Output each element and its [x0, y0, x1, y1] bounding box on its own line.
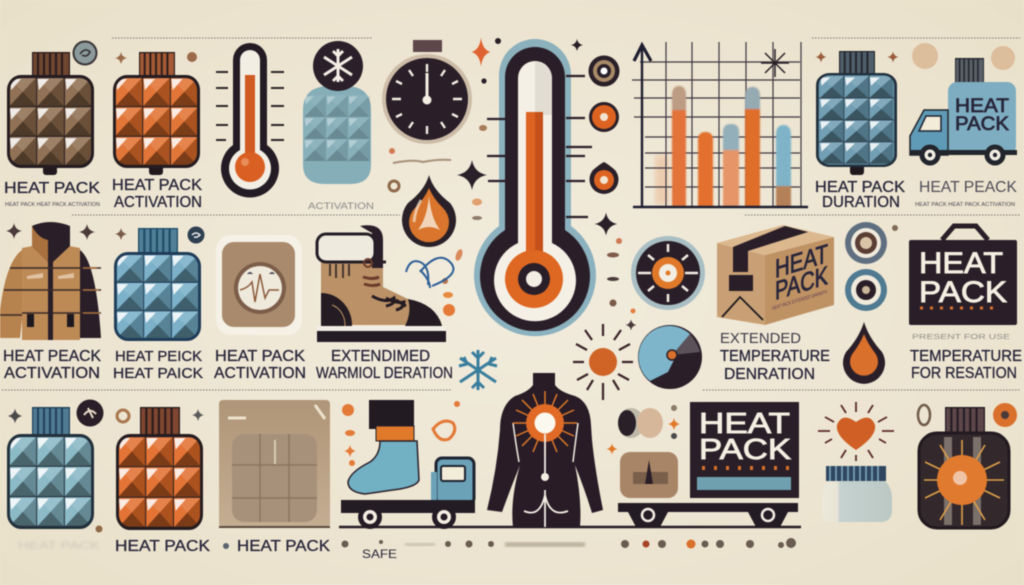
bottom dots — [342, 538, 796, 548]
heading: temperature for resation — [910, 334, 1022, 382]
heading: extendimed warmiol deration: WARMIOL DERATION — [316, 365, 453, 382]
marks — [342, 401, 460, 466]
heading: heat pack activation — [112, 177, 202, 211]
heart with rays — [818, 402, 894, 461]
icon: snowflake badge — [313, 41, 363, 91]
dotted dividers — [2, 38, 1020, 390]
icon: badge — [76, 400, 104, 426]
blue scribble — [406, 258, 453, 288]
heading: heat pack duration: HEAT PACK — [815, 179, 905, 196]
heading: heat pack: HEAT PACK HEAT PACK ACTIVATION — [5, 202, 100, 208]
truck with heat pack — [910, 43, 1017, 166]
heading: heat pack heat paick: HEAT PAICK — [113, 365, 203, 382]
heat pack crate on trailer — [618, 402, 799, 527]
heading: heat peack: HEAT PEACK — [919, 179, 1017, 196]
icon: winter boot — [317, 225, 446, 342]
small thermometer — [216, 43, 284, 197]
truck label — [955, 96, 1009, 135]
heading: heat pack activation: HEAT PACK — [112, 177, 202, 194]
heading: heat pack — [4, 180, 100, 208]
body silhouette with heat — [487, 373, 603, 527]
blue insulated pad — [303, 41, 371, 184]
heading: temperature for resation: PRESENT FOR USE — [912, 334, 1010, 341]
heat pack bag — [909, 226, 1017, 325]
heading: heat pack heat paick — [113, 348, 203, 382]
heading: heat pack activation: ACTIVATION — [214, 365, 306, 382]
icon: orange drop — [843, 322, 885, 384]
heading: extended temperature denration — [720, 330, 830, 383]
tan heat pad panel — [219, 400, 330, 528]
globe disc — [638, 325, 702, 389]
heading: extendimed warmiol deration: EXTENDIMED — [331, 348, 430, 365]
truck label: HEAT — [955, 96, 1009, 117]
heading: heat pack duration — [815, 179, 905, 211]
heading: heat pack: HEAT PACK — [115, 538, 210, 555]
heading: heat pack heat paick: HEAT PEICK — [115, 348, 202, 365]
heading: heat pack activation — [214, 348, 306, 382]
icon: blue snowflake — [459, 350, 497, 390]
bars — [672, 86, 791, 207]
label: activation: ACTIVATION — [308, 201, 374, 211]
faded caption: HEAT PACK — [18, 540, 101, 552]
pack: dark burst — [918, 403, 1017, 528]
radiating sun — [513, 391, 577, 455]
cardboard box — [717, 225, 834, 325]
pack: orange heat pack — [113, 52, 200, 175]
bag label — [919, 247, 1007, 309]
icon: small marks — [816, 52, 898, 62]
label: safe: SAFE — [362, 547, 397, 561]
heading: extended temperature denration: DENRATION — [724, 366, 815, 383]
pack: blue heat pack — [114, 226, 204, 341]
bar chart — [632, 42, 808, 207]
heading: heat pack duration: DURATION — [822, 194, 900, 211]
decorative marks — [389, 38, 636, 330]
bag label: HEAT — [919, 247, 1003, 280]
box label: HEAT — [775, 238, 828, 284]
icon: jacket — [0, 222, 101, 340]
box label: HEAT PACK EXTENDED WARMTH — [772, 289, 827, 312]
icon: badge — [918, 403, 1017, 427]
heading: heat peack activation: ACTIVATION — [4, 365, 100, 382]
heading: heat peack activation — [3, 348, 101, 382]
jar — [822, 466, 892, 522]
heading: heat peack — [915, 179, 1017, 208]
tick marks — [487, 76, 592, 217]
heading: extendimed warmiol deration — [316, 348, 453, 382]
heading: heat pack: HEAT PACK — [237, 538, 330, 555]
icon: starburst — [761, 49, 789, 77]
heading: extended temperature denration: TEMPERATURE — [720, 348, 830, 365]
crate label — [699, 408, 792, 466]
pack: blue lower — [7, 400, 104, 529]
grid lines — [632, 42, 801, 207]
box label — [772, 238, 828, 312]
pack: orange lower — [96, 407, 204, 532]
crate label: PACK — [699, 434, 792, 466]
icon: small marks — [115, 52, 197, 64]
heading: heat pack activation: ACTIVATION — [114, 194, 202, 211]
heading: heat peack: HEAT PACK HEAT PACK ACTIVATION — [915, 202, 1015, 208]
icon: small marks — [96, 409, 204, 532]
heat pad icon — [216, 235, 302, 335]
main thermometer — [474, 39, 596, 336]
icon: badge — [74, 42, 96, 64]
scale dots — [588, 56, 620, 194]
truck label: PACK — [955, 114, 1009, 135]
small tan pack and ovals — [606, 405, 680, 498]
pack: blue heat pack duration — [816, 51, 898, 175]
rings — [845, 222, 898, 311]
axes — [633, 45, 808, 207]
crate label: HEAT — [699, 408, 790, 440]
icon: sun — [573, 324, 633, 400]
heading: heat pack activation: HEAT PACK — [215, 348, 305, 365]
icon: orange droplet — [402, 175, 456, 247]
icon: small marks — [6, 223, 95, 240]
bag label: PACK — [919, 276, 1007, 309]
pack: brown heat pack — [7, 42, 96, 175]
ground line — [339, 526, 801, 528]
dial icon — [631, 236, 705, 310]
box label: PACK — [775, 260, 828, 306]
icon: sock on flatbed truck — [341, 400, 475, 529]
stopwatch — [382, 40, 472, 144]
heading: extended temperature denration: EXTENDED — [720, 330, 801, 347]
heading: heat peack activation: HEAT PEACK — [3, 348, 101, 365]
icon: badge — [188, 226, 204, 244]
heading: heat pack: HEAT PACK — [4, 180, 100, 197]
